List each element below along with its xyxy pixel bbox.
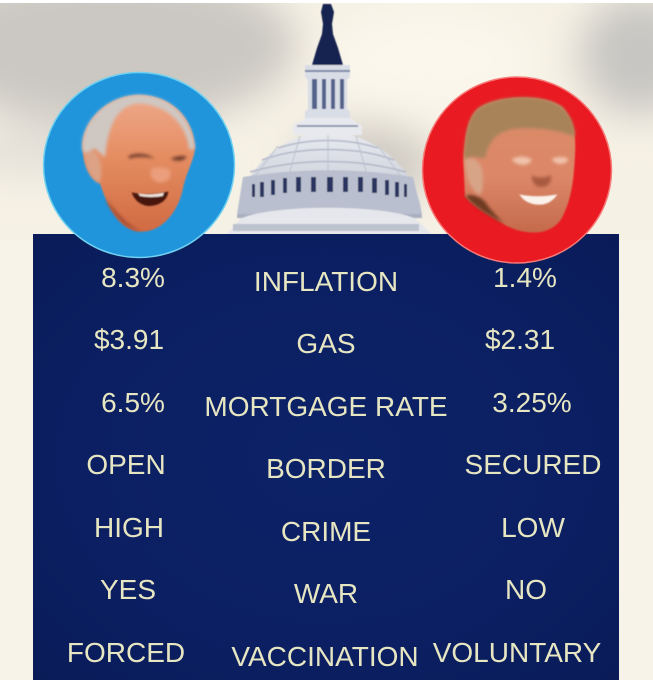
- row: inflation: 1.4%: [493, 262, 557, 293]
- windows: [252, 177, 407, 197]
- row: gas: $3.91: [94, 324, 164, 355]
- row: war: WAR: [294, 578, 358, 609]
- row: war: NO: [505, 574, 547, 605]
- row: border: SECURED: [465, 449, 601, 480]
- row: crime: CRIME: [281, 516, 371, 547]
- row: crime: LOW: [501, 512, 565, 543]
- row: mortgage rate: MORTGAGE RATE: [204, 391, 448, 422]
- face: right portrait: [463, 97, 575, 233]
- row: gas: [94, 324, 555, 359]
- row: mortgage rate: 3.25%: [492, 387, 572, 418]
- row: mortgage rate: 6.5%: [101, 387, 165, 418]
- row: border: BORDER: [266, 453, 386, 484]
- row: inflation: INFLATION: [254, 266, 398, 297]
- row: vaccination: VOLUNTARY: [433, 637, 601, 668]
- lantern: [305, 65, 350, 118]
- row: gas: $2.31: [485, 324, 555, 355]
- row: mortgage rate: [101, 387, 572, 422]
- panel: comparison table background: [33, 234, 619, 680]
- statue: [312, 4, 343, 65]
- ledge: [293, 118, 362, 135]
- row: crime: [94, 512, 565, 547]
- row: inflation: 8.3%: [101, 262, 165, 293]
- row: gas: GAS: [296, 328, 356, 359]
- row: crime: HIGH: [94, 512, 164, 543]
- row: vaccination: FORCED: [67, 637, 185, 668]
- row: inflation: [101, 262, 557, 297]
- row: war: YES: [100, 574, 156, 605]
- dome body: [237, 132, 422, 218]
- row: border: [86, 449, 601, 484]
- drum: [227, 208, 432, 234]
- face: left portrait: [82, 95, 195, 232]
- row: vaccination: [67, 637, 601, 672]
- row: border: OPEN: [86, 449, 166, 480]
- row: war: [100, 574, 547, 609]
- row: vaccination: VACCINATION: [231, 641, 419, 672]
